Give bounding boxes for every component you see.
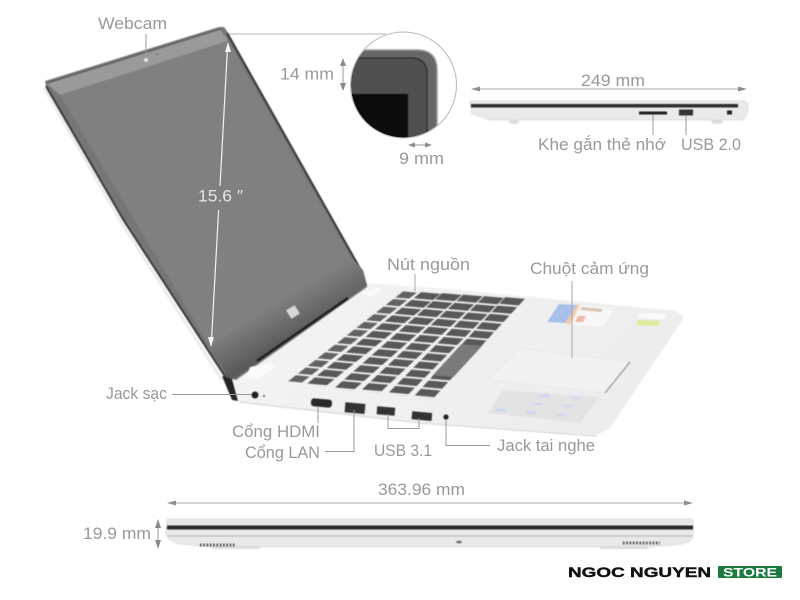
webcam label: Webcam [98, 14, 167, 33]
webcam lens [144, 58, 148, 62]
palm rest label sheet [488, 390, 600, 423]
side view width dimension [471, 71, 747, 92]
charging jack label: Jack sạc [106, 384, 167, 403]
display [60, 41, 350, 347]
USB 3.1 bracket [388, 414, 419, 428]
charging jack leader [172, 394, 252, 396]
LAN label: Cổng LAN [245, 443, 320, 462]
USB 2.0 label: USB 2.0 [681, 135, 741, 154]
front view of laptop [166, 519, 693, 549]
store logo [568, 564, 782, 580]
lid left dark edge [46, 86, 226, 378]
top edge line [47, 29, 220, 83]
bezel callout leader [229, 33, 386, 35]
left hinge cover [246, 363, 275, 379]
touchpad label: Chuột cảm ứng [530, 259, 649, 278]
memory card leader [652, 115, 654, 135]
HDMI leader [317, 407, 319, 423]
thickness dimension: 19.9 mm [83, 524, 151, 543]
store logo: NGOC NGUYEN [568, 564, 711, 580]
screen diagonal arrow [208, 42, 231, 347]
front view width dimension: 363.96 mm [378, 480, 465, 499]
keyboard [293, 292, 515, 398]
side ports [252, 392, 449, 421]
left hinge block [222, 376, 238, 401]
power button leader [414, 274, 416, 291]
14 mm dimension [280, 58, 346, 91]
power button label: Nút nguồn [387, 255, 470, 274]
screen size label: 15.6 ″ [198, 186, 243, 206]
USB 3.1 label: USB 3.1 [374, 441, 432, 460]
side view of laptop [470, 101, 748, 124]
hinge gap [257, 298, 348, 361]
14 mm dimension: 14 mm [280, 64, 334, 84]
base front side edge [240, 402, 597, 436]
large key [443, 345, 472, 376]
9 mm dimension: 9 mm [399, 149, 444, 168]
sensor dot [156, 53, 158, 55]
thickness dimension [83, 519, 161, 549]
magnified bezel circle [350, 32, 457, 138]
right hinge cover [362, 288, 382, 297]
lid side edge light [44, 88, 222, 380]
touchpad [488, 348, 630, 393]
store logo: STORE [723, 566, 777, 580]
LAN leader [325, 410, 354, 452]
HDMI label: Cổng HDMI [232, 422, 320, 441]
side view width dimension: 249 mm [581, 71, 645, 90]
USB 2.0 leader [685, 115, 687, 135]
top bezel [47, 30, 228, 95]
chin bezel [210, 256, 367, 378]
laptop base deck [233, 283, 683, 435]
main laptop illustration [44, 27, 683, 436]
memory card label: Khe gắn thẻ nhớ [538, 135, 666, 154]
lid right dark edge [227, 33, 362, 272]
laptop lid [45, 27, 367, 380]
headphone leader [446, 420, 490, 446]
front view width dimension [167, 480, 693, 506]
Dell logo [286, 305, 300, 319]
headphone label: Jack tai nghe [497, 436, 595, 455]
webcam leader [145, 34, 147, 58]
touchpad leader [571, 281, 573, 358]
stickers [547, 304, 666, 327]
